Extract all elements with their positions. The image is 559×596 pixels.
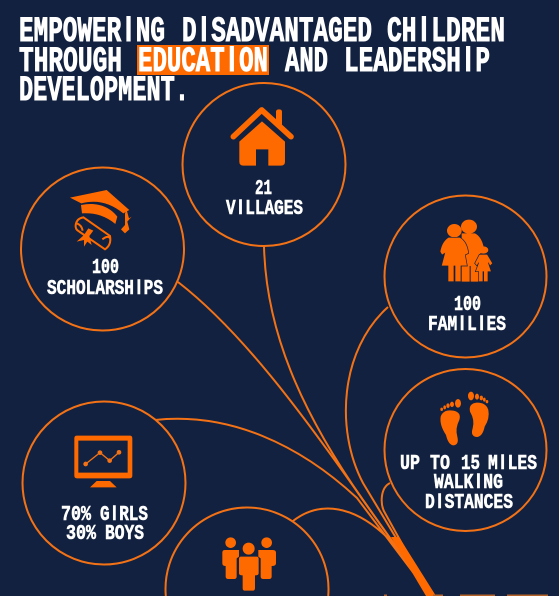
curve: girls (155, 419, 431, 596)
icon: house (233, 109, 291, 166)
title (19, 10, 505, 111)
connector curves (155, 246, 431, 596)
title line 1 (19, 10, 505, 52)
heading fragment: apex (384, 594, 387, 596)
label: 100 families: 100 (454, 294, 481, 317)
label: girls and boys split (61, 502, 148, 546)
panel: bottom group (165, 508, 329, 596)
title line 1: CHILDREN (387, 10, 505, 52)
connector trunk (391, 537, 436, 596)
panel: scholarships (21, 168, 184, 330)
icon: footprints (440, 392, 489, 445)
title line 3: DEVELOPMENT. (19, 71, 189, 111)
title line 1: EMPOWERING (19, 10, 165, 52)
label: walking distances: 15 (461, 453, 480, 476)
title line 2: AND (285, 42, 328, 82)
label: 21 villages (226, 178, 303, 221)
panel: girls and boys (22, 402, 186, 564)
panel: families (384, 196, 546, 358)
label: walking distances: WALKING (434, 470, 503, 495)
icon: monitor chart (74, 436, 132, 487)
label: walking distances: TO (430, 453, 450, 476)
curve: bottom circle (293, 509, 431, 596)
icon: family (440, 220, 493, 282)
title line 1: DISADVANTAGED (182, 10, 372, 52)
label: girls and boys split: GIRLS (100, 502, 148, 527)
label: walking distances: DISTANCES (425, 490, 513, 515)
panel: walking distances (384, 369, 546, 531)
label: 100 families: FAMILIES (428, 312, 506, 337)
heading fragment: bar 2 (460, 594, 495, 596)
title line 2: THROUGH (19, 42, 122, 82)
label: 100 scholarships: 100 (92, 257, 119, 280)
label: 100 scholarships: SCHOLARSHIPS (47, 276, 163, 301)
curve: walking (382, 483, 431, 596)
label: 21 villages: VILLAGES (226, 196, 303, 221)
label: walking distances: UP (400, 453, 420, 476)
label: walking distances: MILES (488, 451, 537, 476)
label: walking distances (400, 451, 537, 515)
label: girls and boys split: 70% (61, 504, 91, 527)
heading fragment: bar 1 (433, 594, 443, 596)
title line 2: LEADERSHIP (344, 40, 490, 82)
label: 100 scholarships (47, 257, 163, 301)
heading fragment: bar 3 (507, 594, 548, 596)
label: girls and boys split: 30% (66, 523, 96, 546)
cut-off heading (384, 594, 548, 596)
label: 100 families (428, 294, 506, 337)
curve: families (346, 307, 431, 596)
icon: people (222, 537, 276, 591)
label: 21 villages: 21 (255, 178, 272, 201)
curve: scholarships (178, 282, 431, 596)
label: girls and boys split: BOYS (105, 523, 144, 546)
panel: villages (182, 83, 346, 246)
title line 2 (19, 40, 490, 82)
highlight: education (137, 45, 269, 75)
icon: graduation cap and diploma (70, 190, 132, 249)
curve: villages (264, 246, 431, 596)
title line 2: EDUCATION (138, 40, 268, 82)
